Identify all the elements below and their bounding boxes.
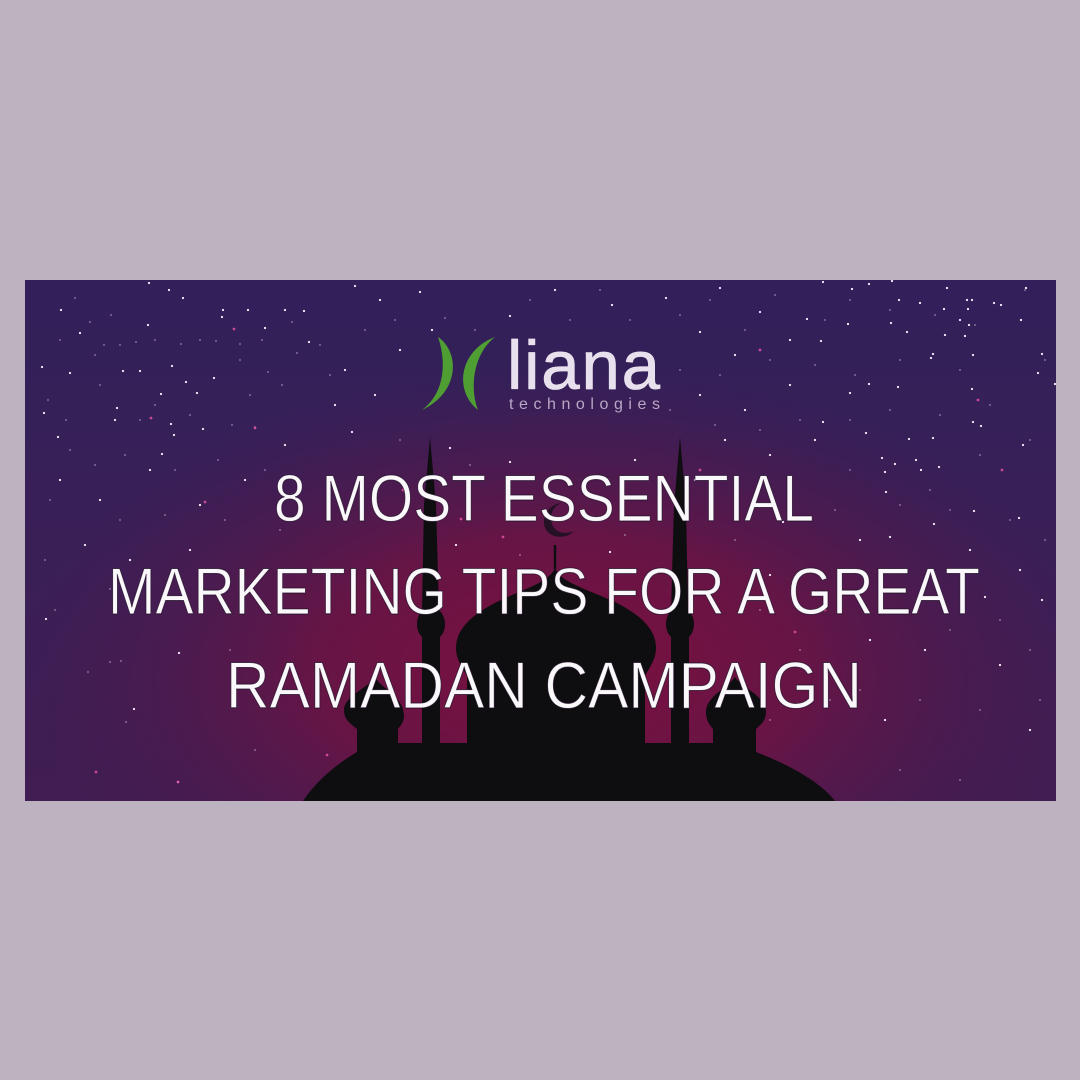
crescent on finial <box>544 503 573 537</box>
star field <box>42 281 1055 782</box>
title <box>112 474 979 709</box>
logo: liana technologies <box>422 337 660 412</box>
panel: night sky banner <box>25 280 1056 801</box>
mosque silhouette <box>303 437 835 801</box>
right minaret <box>666 437 694 746</box>
logo tagline: technologies <box>509 396 660 413</box>
dome finial <box>554 545 556 569</box>
title: 8 MOST ESSENTIAL <box>274 461 814 535</box>
left minaret <box>417 437 445 746</box>
infographic banner <box>25 280 1056 801</box>
logo crescents <box>422 337 495 410</box>
logo wordmark: liana <box>507 327 661 404</box>
main building base <box>303 743 835 801</box>
title: RAMADAN CAMPAIGN <box>226 648 862 722</box>
right small dome <box>706 677 766 750</box>
central dome <box>456 567 656 750</box>
left small dome <box>344 680 404 743</box>
